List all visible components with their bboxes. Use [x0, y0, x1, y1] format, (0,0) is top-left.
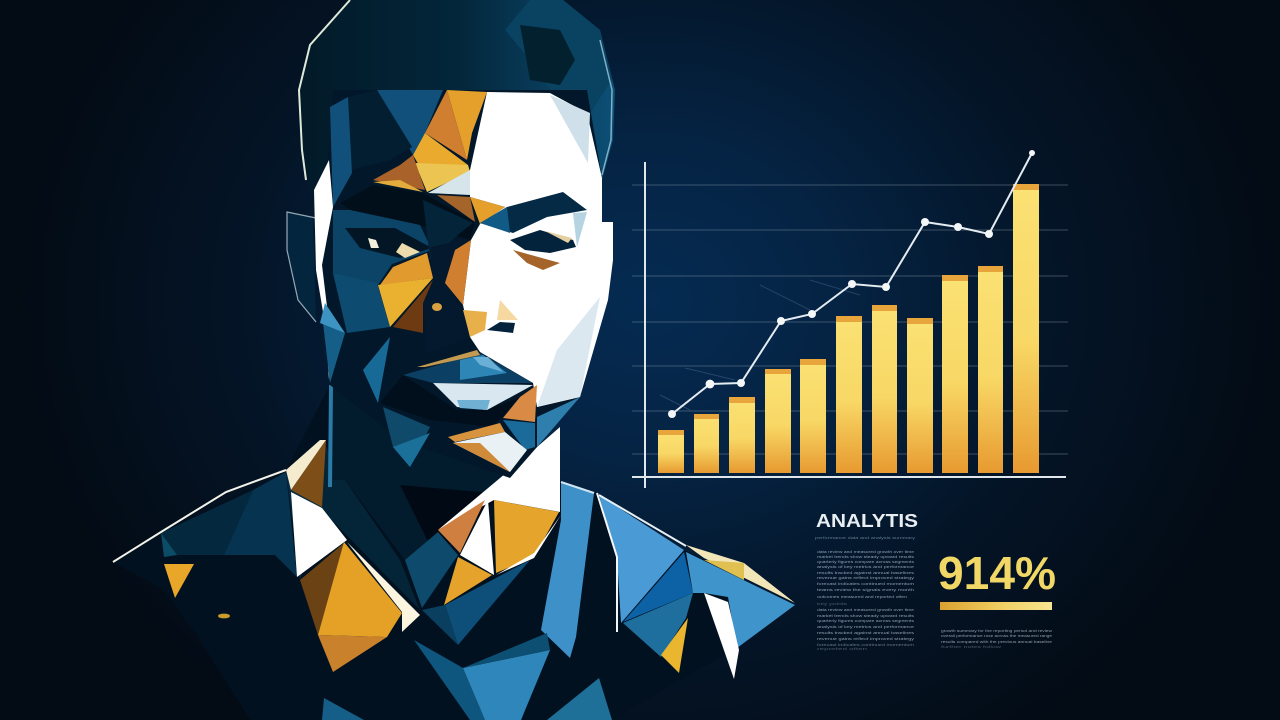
text block: left: quarterly figures compare across segments	[817, 559, 914, 564]
face	[314, 90, 613, 478]
white side of face	[463, 92, 613, 407]
text block: left: teams review the signals every month	[817, 587, 914, 592]
progress bar	[940, 602, 1052, 610]
text block: left: analysis of key metrics and performance	[817, 624, 915, 629]
nose	[423, 240, 470, 353]
text block: left: results tracked against annual baselines	[817, 630, 914, 635]
text block: left: quarterly figures compare across segments	[817, 618, 914, 623]
text block: left: outcomes measured and reported often	[817, 594, 907, 599]
text block: left: data review and measured growth over time	[817, 549, 915, 554]
text block: left: analysis of key metrics and performance	[817, 564, 915, 569]
forehead facets	[377, 90, 443, 155]
right collar facets	[405, 500, 561, 645]
jacket blue panels	[322, 482, 795, 720]
text block: right	[941, 628, 1053, 649]
text block: left: market trends show steady upward results	[817, 613, 914, 618]
left ear	[287, 212, 316, 322]
heading: ANALYTIS	[816, 511, 918, 531]
text block: right: further notes follow	[941, 644, 1001, 649]
icon: small yellow triangle	[164, 564, 194, 598]
text block: left: key points	[817, 601, 847, 606]
left cheek facets	[380, 253, 433, 285]
text block: left: revenue gains reflect improved strategy	[817, 575, 914, 580]
chin	[503, 385, 537, 422]
bar and line chart	[632, 150, 1068, 488]
left collar facets	[286, 440, 420, 672]
neck	[328, 385, 560, 560]
hair	[299, 0, 615, 192]
text block: right: growth summary for the reporting period and review	[941, 628, 1052, 633]
portrait: low-poly man	[113, 0, 795, 720]
text block: right: overall performance rose across the measured range	[941, 633, 1053, 638]
big stat: 914%	[938, 547, 1056, 599]
text block: left: reported often	[817, 646, 867, 651]
subheading caption: performance data and analysis summary	[815, 536, 915, 540]
text block: left: results tracked against annual baselines	[817, 570, 914, 575]
brows and eyes	[340, 185, 475, 240]
left shoulder highlight	[113, 470, 286, 562]
text block: left: revenue gains reflect improved strategy	[817, 636, 914, 641]
shoulders and jacket	[113, 385, 795, 720]
axes	[632, 162, 1066, 488]
mouth	[380, 375, 520, 427]
text block: left: forecast indicates continued momentum	[817, 581, 915, 586]
text block: right: results compared with the previous annual baseline	[941, 639, 1053, 644]
trend line	[668, 150, 1035, 418]
text block: left: market trends show steady upward results	[817, 554, 914, 559]
text block: left	[817, 549, 915, 651]
text block: left: data review and measured growth over time	[817, 607, 915, 612]
bars	[658, 184, 1039, 473]
text block: left: forecast indicates continued momentum	[817, 642, 915, 647]
grid lines	[632, 185, 1068, 454]
